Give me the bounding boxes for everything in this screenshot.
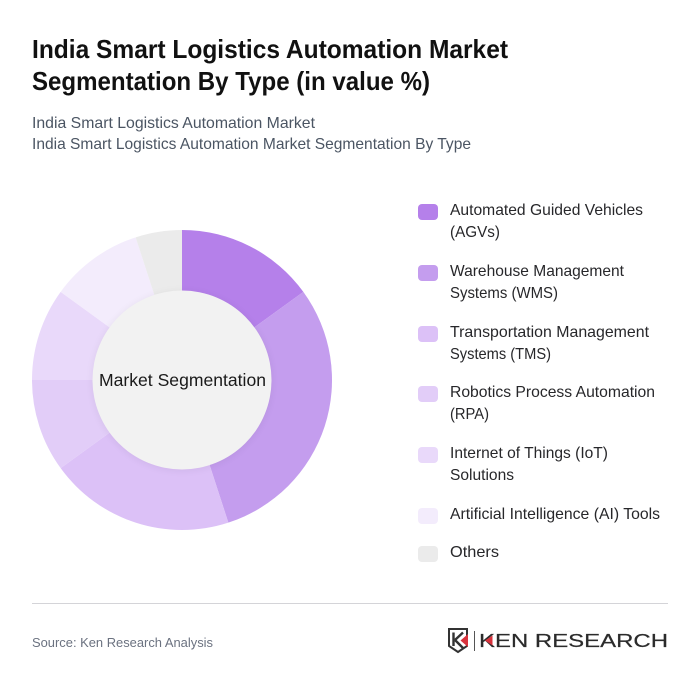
segment: Internet of Things Solutions — [32, 292, 182, 380]
legend item: WMS: Systems (WMS) — [450, 285, 558, 302]
segment: Robotics Process Automation — [32, 380, 182, 468]
legend item: TMS: Transportation Management — [450, 324, 650, 341]
title — [32, 34, 508, 96]
legend — [418, 202, 660, 562]
logo wordmark: KEN RESEARCH — [479, 631, 668, 651]
legend item: AGVs: Automated Guided Vehicles — [450, 202, 643, 219]
legend item: IoT: Internet of Things (IoT) — [450, 445, 608, 462]
legend item: Others: Others — [450, 544, 499, 561]
legend item: IoT — [418, 445, 608, 484]
segment: Warehouse Management Systems — [182, 292, 332, 523]
title: Segmentation By Type (in value %) — [32, 66, 430, 96]
legend item: TMS: Systems (TMS) — [450, 346, 551, 363]
legend item: AI: Artificial Intelligence (AI) Tools — [450, 506, 660, 523]
donut centre label — [92, 290, 272, 470]
legend item: RPA: Robotics Process Automation — [450, 384, 655, 401]
legend item: RPA: (RPA) — [450, 406, 489, 423]
legend item: IoT: Solutions — [450, 467, 514, 484]
donut centre label: Market Segmentation — [99, 370, 266, 390]
logo: Ken Research — [449, 629, 668, 652]
legend item: AGVs: (AGVs) — [450, 224, 500, 241]
legend item: WMS: Warehouse Management — [450, 263, 625, 280]
legend item: TMS — [418, 324, 650, 363]
segment: Automated Guided Vehicles — [182, 230, 303, 380]
segment: Others — [136, 230, 182, 380]
legend item: RPA — [418, 384, 655, 423]
segment: Artificial Intelligence Tools — [61, 237, 182, 380]
title: India Smart Logistics Automation Market — [32, 34, 508, 64]
legend item: WMS — [418, 263, 625, 302]
legend item: Others — [418, 544, 499, 562]
segment: Transportation Management Systems — [61, 380, 228, 530]
subtitle — [32, 115, 471, 153]
subtitle: India Smart Logistics Automation Market Segmentation By Type — [32, 136, 471, 153]
subtitle: India Smart Logistics Automation Market — [32, 115, 316, 132]
icon: shield — [449, 629, 468, 652]
source note: Source: Ken Research Analysis — [32, 635, 213, 650]
donut chart — [32, 230, 332, 530]
legend item: AGVs — [418, 202, 643, 241]
